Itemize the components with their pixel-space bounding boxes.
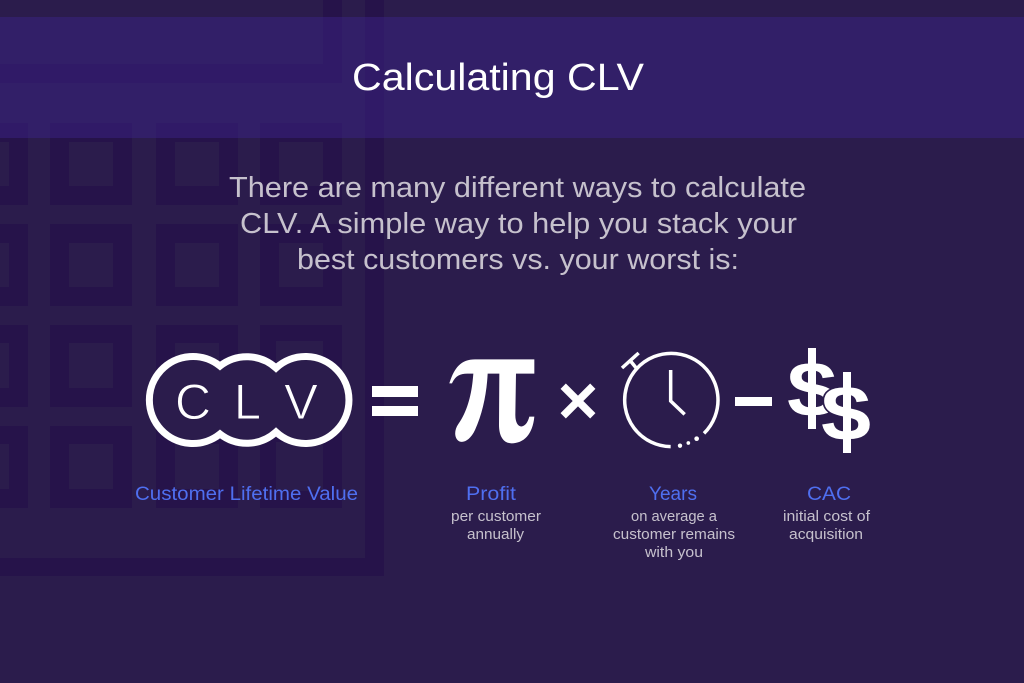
header band — [0, 17, 1024, 138]
icon: CLV badge: V — [284, 374, 319, 430]
icon: dollar signs: $ — [821, 369, 871, 457]
icon: minus sign — [735, 397, 772, 406]
label: CAC: initial cost of — [783, 509, 871, 525]
icon: pi symbol — [449, 359, 534, 443]
label: Years: Years — [649, 484, 697, 505]
label: Customer Lifetime Value: Customer Lifetime Value — [135, 484, 358, 505]
label: Years: on average a — [631, 509, 718, 525]
label: Profit: per customer — [451, 509, 541, 525]
label: Profit — [451, 484, 541, 543]
icon: equals sign — [372, 386, 418, 416]
label: Years: with you — [644, 545, 703, 561]
label: CAC: acquisition — [789, 527, 863, 543]
label: CAC: CAC — [807, 484, 851, 505]
icon: dollar signs — [787, 345, 871, 457]
intro text block: best customers vs. your worst is: — [297, 244, 739, 276]
label: Profit: Profit — [466, 484, 517, 505]
label: CAC — [783, 484, 871, 543]
label: Years: customer remains — [613, 527, 735, 543]
intro text block: CLV. A simple way to help you stack your — [240, 208, 797, 240]
intro text block — [229, 172, 806, 276]
icon: dollar signs: $ — [787, 345, 837, 433]
icon: stopwatch — [622, 353, 718, 448]
intro text block: There are many different ways to calculate — [229, 172, 806, 204]
label: Years — [613, 484, 735, 561]
title: Calculating CLV — [352, 57, 645, 99]
icon: CLV badge: C — [175, 374, 211, 430]
icon: multiply sign — [563, 386, 593, 416]
icon: CLV badge — [149, 356, 349, 444]
label: Profit: annually — [467, 527, 525, 543]
icon: CLV badge: L — [234, 374, 261, 430]
